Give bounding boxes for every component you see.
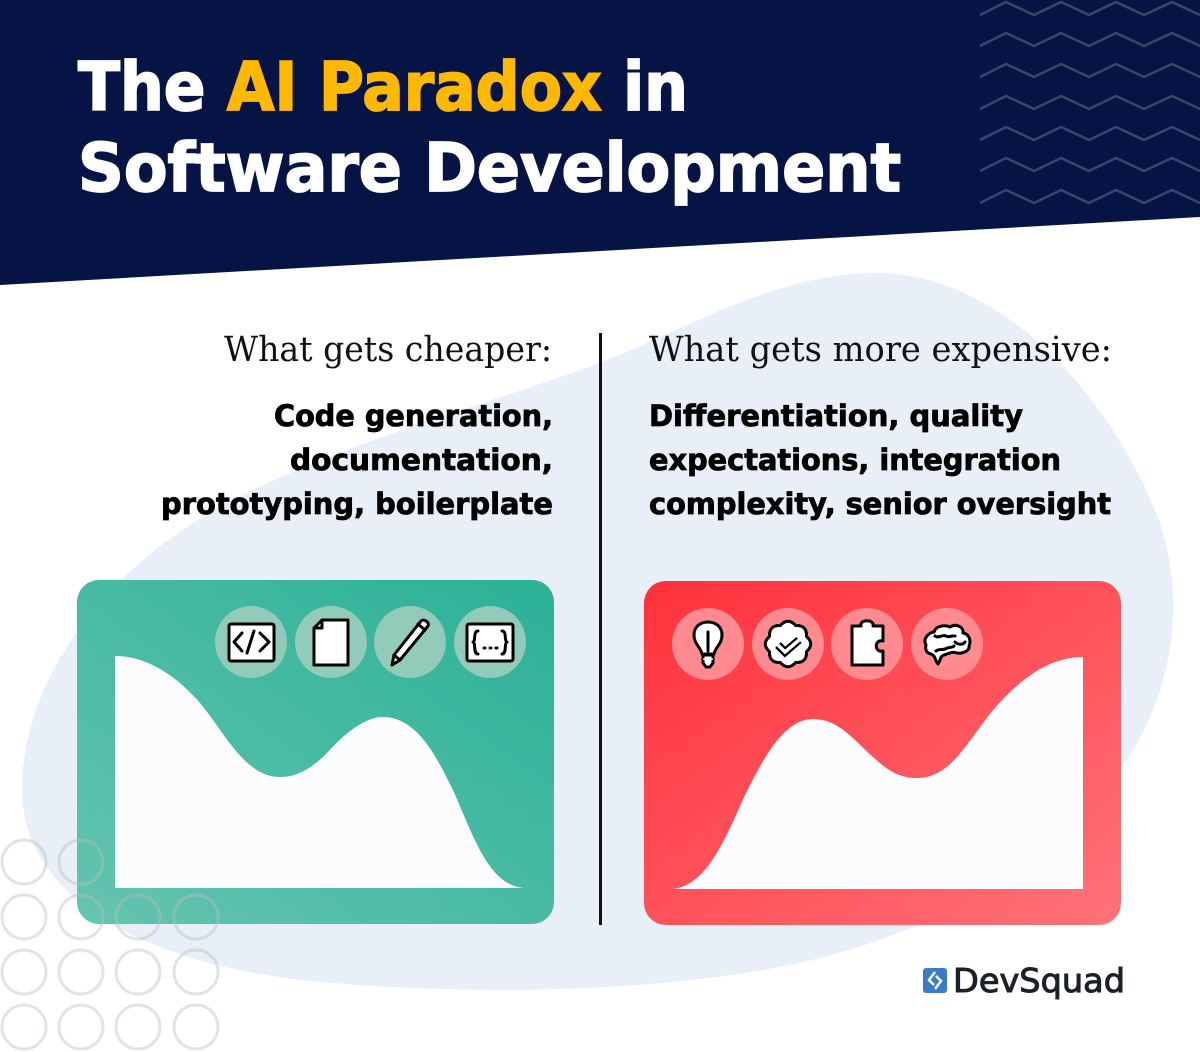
text block: expensive items: complexity, senior oversight	[649, 487, 1111, 521]
text block: cheaper items: documentation,	[290, 443, 553, 477]
icon: brain	[911, 608, 983, 680]
icon: light bulb	[672, 608, 744, 680]
area curve: cheaper	[115, 656, 527, 888]
icon: document	[295, 606, 367, 678]
text block: expensive items: Differentiation, quality	[649, 399, 1023, 433]
text block: cheaper items: prototyping, boilerplate	[161, 487, 553, 521]
icon: pencil	[374, 606, 446, 678]
center divider	[599, 333, 602, 925]
icon: braces window	[454, 606, 526, 678]
decorative circle grid	[2, 840, 218, 1049]
heading: what gets cheaper: What gets cheaper:	[224, 330, 552, 370]
background blob	[22, 273, 1173, 990]
logo: DevSquad: DevSquad	[953, 961, 1125, 1000]
panel: expensive chart	[644, 581, 1121, 925]
zigzag pattern	[980, 2, 1200, 203]
header band	[0, 0, 1200, 285]
icon: puzzle piece	[831, 608, 903, 680]
panel: cheaper chart	[77, 580, 554, 924]
text block: cheaper items: Code generation,	[274, 399, 553, 433]
text block: cheaper items	[161, 399, 553, 521]
heading: what gets more expensive: What gets more expensive:	[649, 330, 1112, 370]
text block: expensive items: expectations, integration	[649, 443, 1061, 477]
title	[78, 48, 901, 207]
title: Software Development	[78, 129, 901, 207]
text block: expensive items	[649, 399, 1111, 521]
icon: quality badge	[752, 608, 824, 680]
title: The AI Paradox in	[78, 48, 688, 126]
logo mark	[923, 968, 947, 993]
icon: code window	[215, 606, 287, 678]
area curve: expensive	[670, 657, 1083, 889]
